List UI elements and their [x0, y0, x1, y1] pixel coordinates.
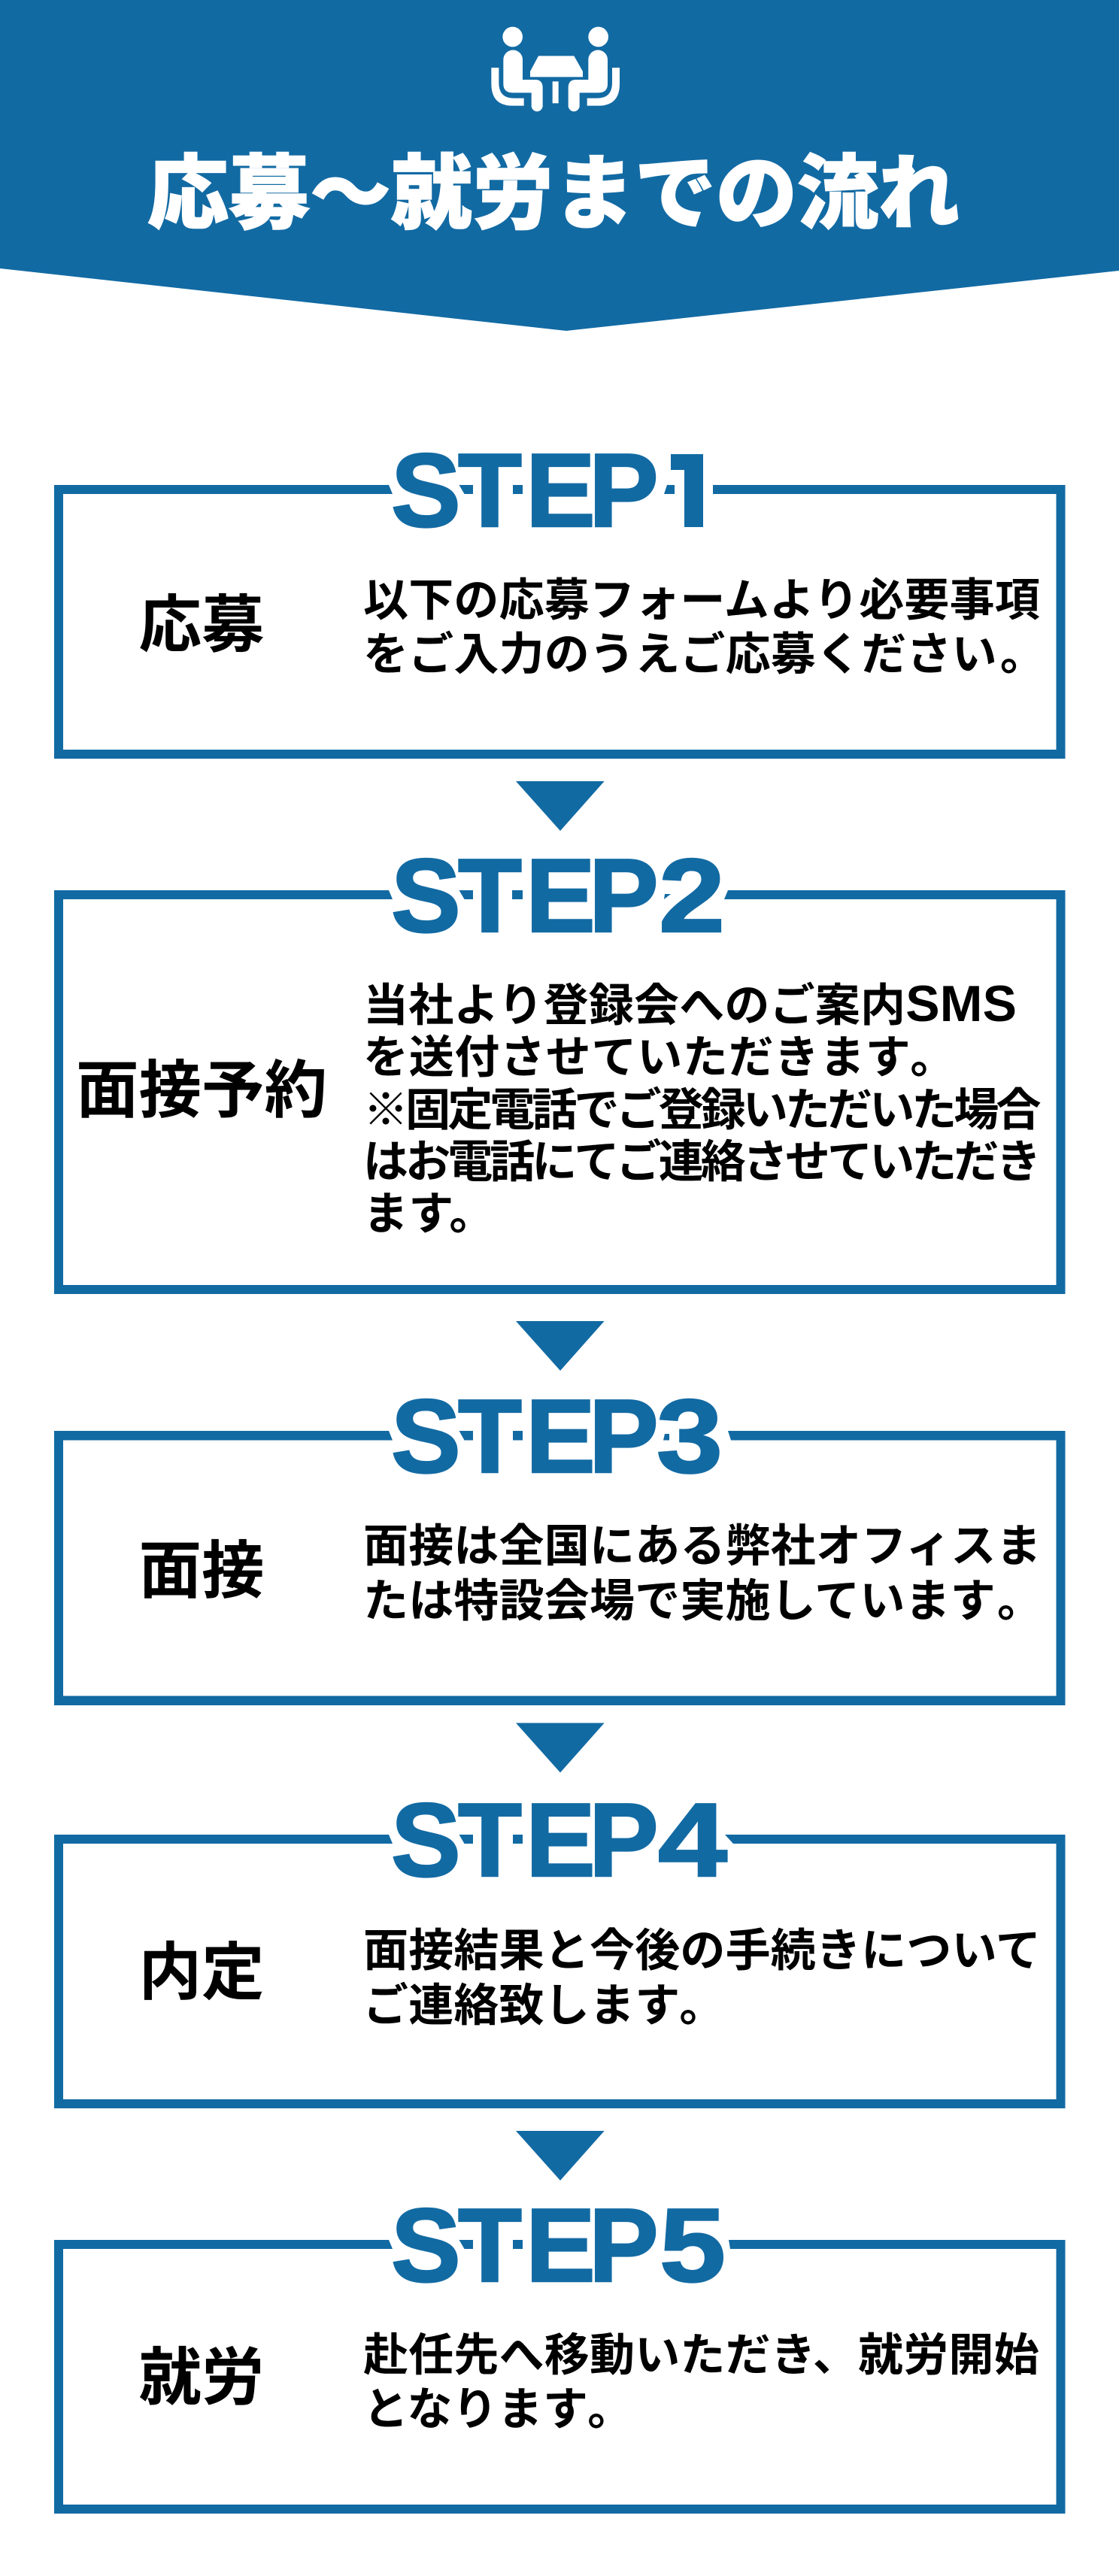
arrow 1 — [516, 781, 605, 831]
step 4 label: 内定 — [138, 1937, 265, 2008]
step 5 description: となります。 — [363, 2384, 632, 2435]
step 1 label: 応募 — [138, 589, 265, 660]
step 1 description: をご入力のうえご応募ください。 — [363, 629, 1045, 680]
arrow 2 — [516, 1321, 605, 1371]
step 1 heading: STEP — [391, 432, 659, 549]
step 3 description: たは特設会場で実施しています。 — [363, 1576, 1042, 1626]
step 3 description — [363, 1521, 1042, 1626]
step 5 label: 就労 — [138, 2342, 265, 2413]
step 5 description — [363, 2330, 1039, 2435]
title: 応募～就労までの流れ — [147, 148, 960, 239]
panel: step 2 — [54, 838, 1065, 1294]
step 2 description — [363, 975, 1041, 1239]
arrow 3 — [516, 1723, 605, 1773]
step 2 heading: 2 — [659, 838, 725, 954]
step 4 heading: 4 — [658, 1782, 727, 1899]
step 2 description: 当社より登録会へのご案内SMS — [363, 975, 1017, 1032]
panel: step 3 — [54, 1378, 1065, 1705]
panel: step 4 — [54, 1782, 1065, 2108]
step 4 description: 面接結果と今後の手続きについて — [363, 1926, 1041, 1976]
step 1 heading — [393, 453, 703, 529]
panel: step 1 — [54, 432, 1065, 759]
step 2 description: を送付させていただきます。 — [363, 1032, 956, 1083]
step 1 description: 以下の応募フォームより必要事項 — [363, 575, 1040, 626]
step 2 label: 面接予約 — [76, 1055, 327, 1126]
step 1 heading: 1 — [664, 433, 722, 550]
icon: two people meeting at a table — [491, 27, 620, 111]
step 2 description: ※固定電話でご登録いただいた場合 — [363, 1085, 1041, 1135]
step 4 heading: STEP — [391, 1782, 659, 1899]
step 5 heading: STEP — [391, 2187, 659, 2304]
step 4 description — [363, 1926, 1041, 2031]
arrow 4 — [516, 2131, 605, 2181]
step 3 label: 面接 — [138, 1535, 265, 1606]
step 4 description: ご連絡致します。 — [363, 1980, 725, 2031]
panel: step 5 — [54, 2187, 1065, 2514]
step 5 heading: 5 — [660, 2187, 726, 2304]
step 3 heading: 3 — [657, 1378, 723, 1495]
step 2 description: ます。 — [363, 1189, 495, 1239]
step 2 heading: STEP — [391, 838, 659, 954]
step 3 heading: STEP — [391, 1378, 659, 1495]
step 3 description: 面接は全国にある弊社オフィスま — [363, 1521, 1042, 1571]
step 2 description: はお電話にてご連絡させていただき — [363, 1137, 1039, 1187]
step 1 description — [363, 575, 1045, 680]
header banner — [0, 0, 1119, 331]
step 5 description: 赴任先へ移動いただき、就労開始 — [363, 2330, 1039, 2381]
